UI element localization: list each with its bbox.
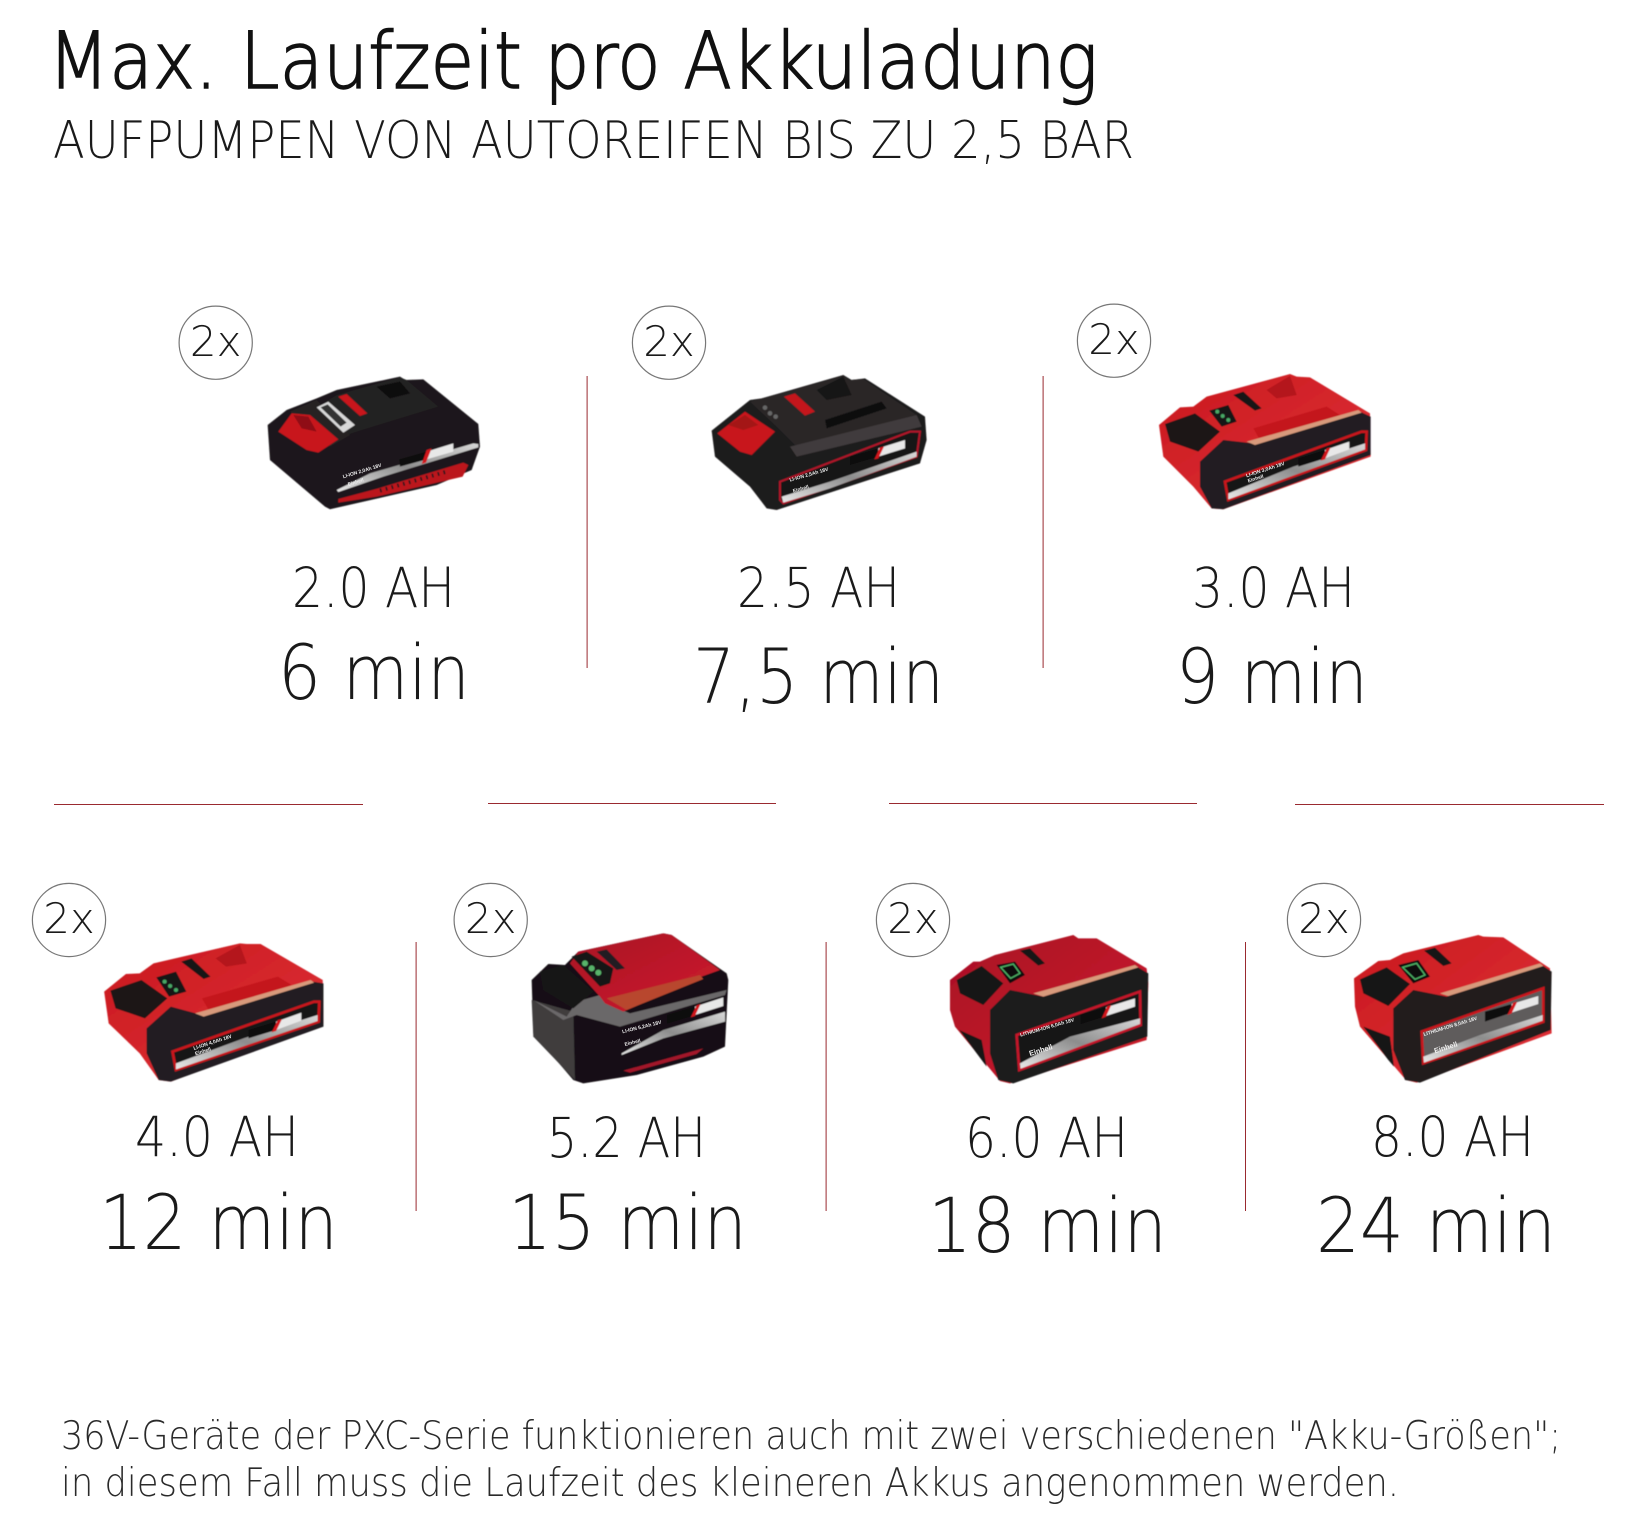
panel: 2.0 Ah battery <box>179 306 480 717</box>
panel: 8.0 Ah battery <box>1287 883 1556 1270</box>
amp hours: 2.5 AH <box>737 556 900 620</box>
panel: 3.0 Ah battery <box>1077 304 1371 721</box>
panel: 4.0 Ah battery <box>32 883 338 1267</box>
icon: 8.0 Ah battery: LITHIUM-ION 8,0Ah 18V <box>1423 1016 1479 1038</box>
runtime: 6 min <box>278 628 470 717</box>
runtime: 24 min <box>1316 1181 1556 1270</box>
divider <box>587 376 588 668</box>
panel: 5.2 Ah battery <box>454 883 747 1267</box>
icon: 2.0 Ah battery <box>268 377 480 509</box>
badge: 2x <box>876 883 950 957</box>
amp hours: 3.0 AH <box>1192 556 1355 620</box>
badge: 2x: 2x <box>190 317 241 366</box>
icon: 6.0 Ah battery <box>950 935 1148 1083</box>
icon: 4.0 Ah battery: LI-ION 4,0Ah 18V <box>193 1034 233 1052</box>
runtime: 15 min <box>508 1178 747 1267</box>
icon: 2.0 Ah battery: LI-ION 2,0Ah 18V <box>342 463 383 480</box>
icon: 2.5 Ah battery: Einhell <box>792 484 810 495</box>
icon: 5.2 Ah battery: LI-ION 5,2Ah 18V <box>622 1020 663 1035</box>
icon: 2.5 Ah battery: LI-ION 2,5Ah 18V <box>789 467 830 484</box>
badge: 2x: 2x <box>1088 315 1140 364</box>
badge: 2x: 2x <box>43 894 95 943</box>
badge: 2x: 2x <box>887 894 939 943</box>
footnote: in diesem Fall muss die Laufzeit des kleineren Akkus angenommen werden. <box>61 1461 1399 1506</box>
amp hours: 8.0 AH <box>1371 1105 1534 1169</box>
subtitle: AUFPUMPEN VON AUTOREIFEN BIS ZU 2,5 BAR <box>53 111 1134 171</box>
icon: 3.0 Ah battery: LI-ION 3,0Ah 18V <box>1245 461 1286 479</box>
runtime: 12 min <box>99 1178 338 1267</box>
badge: 2x <box>1077 304 1151 377</box>
panel: 6.0 Ah battery <box>876 883 1167 1270</box>
runtime: 7,5 min <box>693 632 944 721</box>
divider <box>826 942 827 1211</box>
badge: 2x <box>179 306 252 379</box>
icon: 2.0 Ah battery: Einhell <box>347 477 365 488</box>
icon: 6.0 Ah battery: LITHIUM-ION 6,0Ah 18V <box>1020 1017 1076 1039</box>
badge: 2x: 2x <box>643 317 695 366</box>
icon: 5.2 Ah battery <box>532 933 728 1083</box>
badge: 2x <box>454 883 527 957</box>
badge: 2x <box>632 306 706 379</box>
separators between rows <box>54 803 1604 805</box>
badge: 2x: 2x <box>1298 894 1350 943</box>
amp hours: 4.0 AH <box>135 1105 299 1169</box>
amp hours: 6.0 AH <box>965 1106 1128 1170</box>
runtime: 9 min <box>1176 632 1368 721</box>
badge: 2x <box>32 883 106 957</box>
icon: 8.0 Ah battery: Einhell <box>1433 1040 1459 1055</box>
icon: 4.0 Ah battery <box>104 943 323 1082</box>
divider <box>416 942 417 1211</box>
icon: 2.5 Ah battery <box>712 375 927 510</box>
runtime: 18 min <box>928 1181 1167 1270</box>
panel: 2.5 Ah battery <box>632 306 944 721</box>
amp hours: 2.0 AH <box>292 556 455 620</box>
divider <box>1245 942 1246 1211</box>
icon: 8.0 Ah battery <box>1354 935 1552 1083</box>
title: Max. Laufzeit pro Akkuladung <box>48 17 1098 107</box>
divider <box>1043 376 1044 668</box>
badge: 2x: 2x <box>465 894 516 943</box>
icon: 3.0 Ah battery <box>1159 374 1371 509</box>
badge: 2x <box>1287 883 1361 957</box>
footnote <box>61 1414 1561 1506</box>
amp hours: 5.2 AH <box>547 1106 706 1170</box>
icon: 3.0 Ah battery: Einhell <box>1247 474 1265 485</box>
icon: 6.0 Ah battery: Einhell <box>1028 1042 1054 1058</box>
icon: 5.2 Ah battery: Einhell <box>624 1038 642 1048</box>
icon: 4.0 Ah battery: Einhell <box>194 1046 212 1057</box>
